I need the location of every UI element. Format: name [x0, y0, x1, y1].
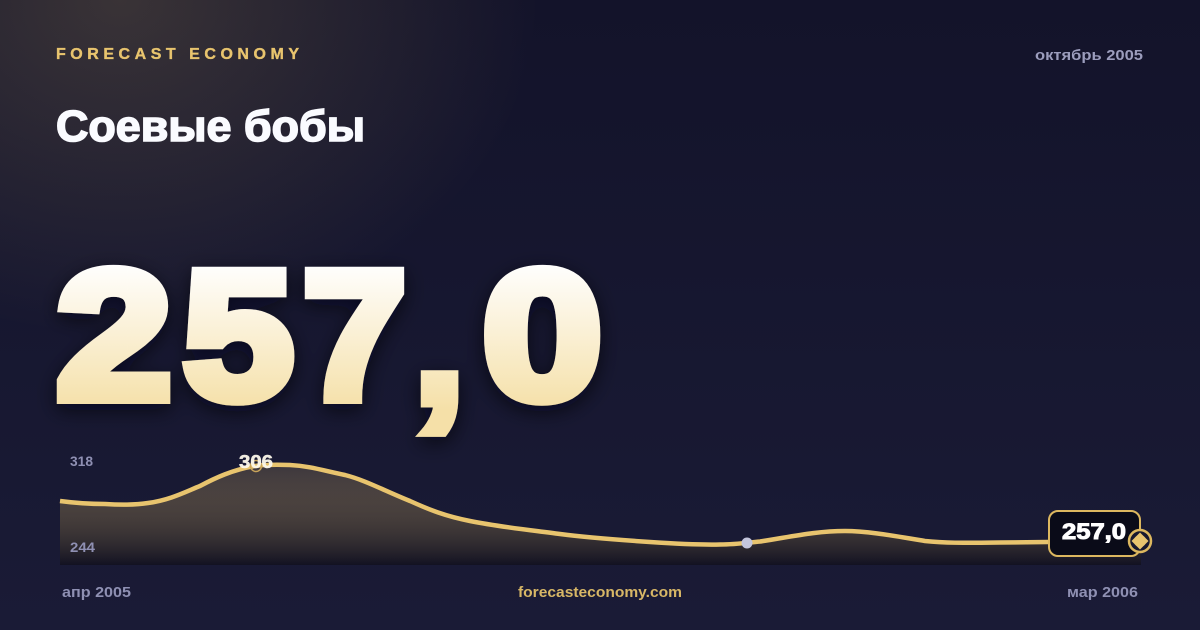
big value: 0: [483, 234, 602, 437]
peak value: 306: [239, 452, 273, 472]
current value marker: [1129, 530, 1151, 552]
area fill: [60, 465, 1141, 565]
big value: [56, 232, 602, 444]
source: forecasteconomy.com: [518, 584, 682, 601]
peak marker: [250, 460, 262, 472]
end date: мар 2006: [1067, 584, 1138, 601]
axis label: max: 318: [70, 454, 93, 469]
axis label: min: 244: [70, 540, 96, 555]
date label: октябрь 2005: [1035, 47, 1143, 64]
big value: 2: [56, 234, 172, 437]
big value: 7: [303, 234, 406, 437]
brand label: FORECAST ECONOMY: [56, 46, 299, 63]
start date: апр 2005: [62, 584, 131, 601]
title: Соевые бобы: [56, 102, 365, 151]
big value: ,: [412, 232, 467, 444]
current value callout: [1049, 511, 1140, 556]
low marker: [742, 538, 752, 548]
current value callout: 257,0: [1062, 519, 1126, 544]
trend line: [60, 465, 1141, 545]
area chart: [60, 452, 1151, 565]
big value: 5: [183, 235, 293, 437]
